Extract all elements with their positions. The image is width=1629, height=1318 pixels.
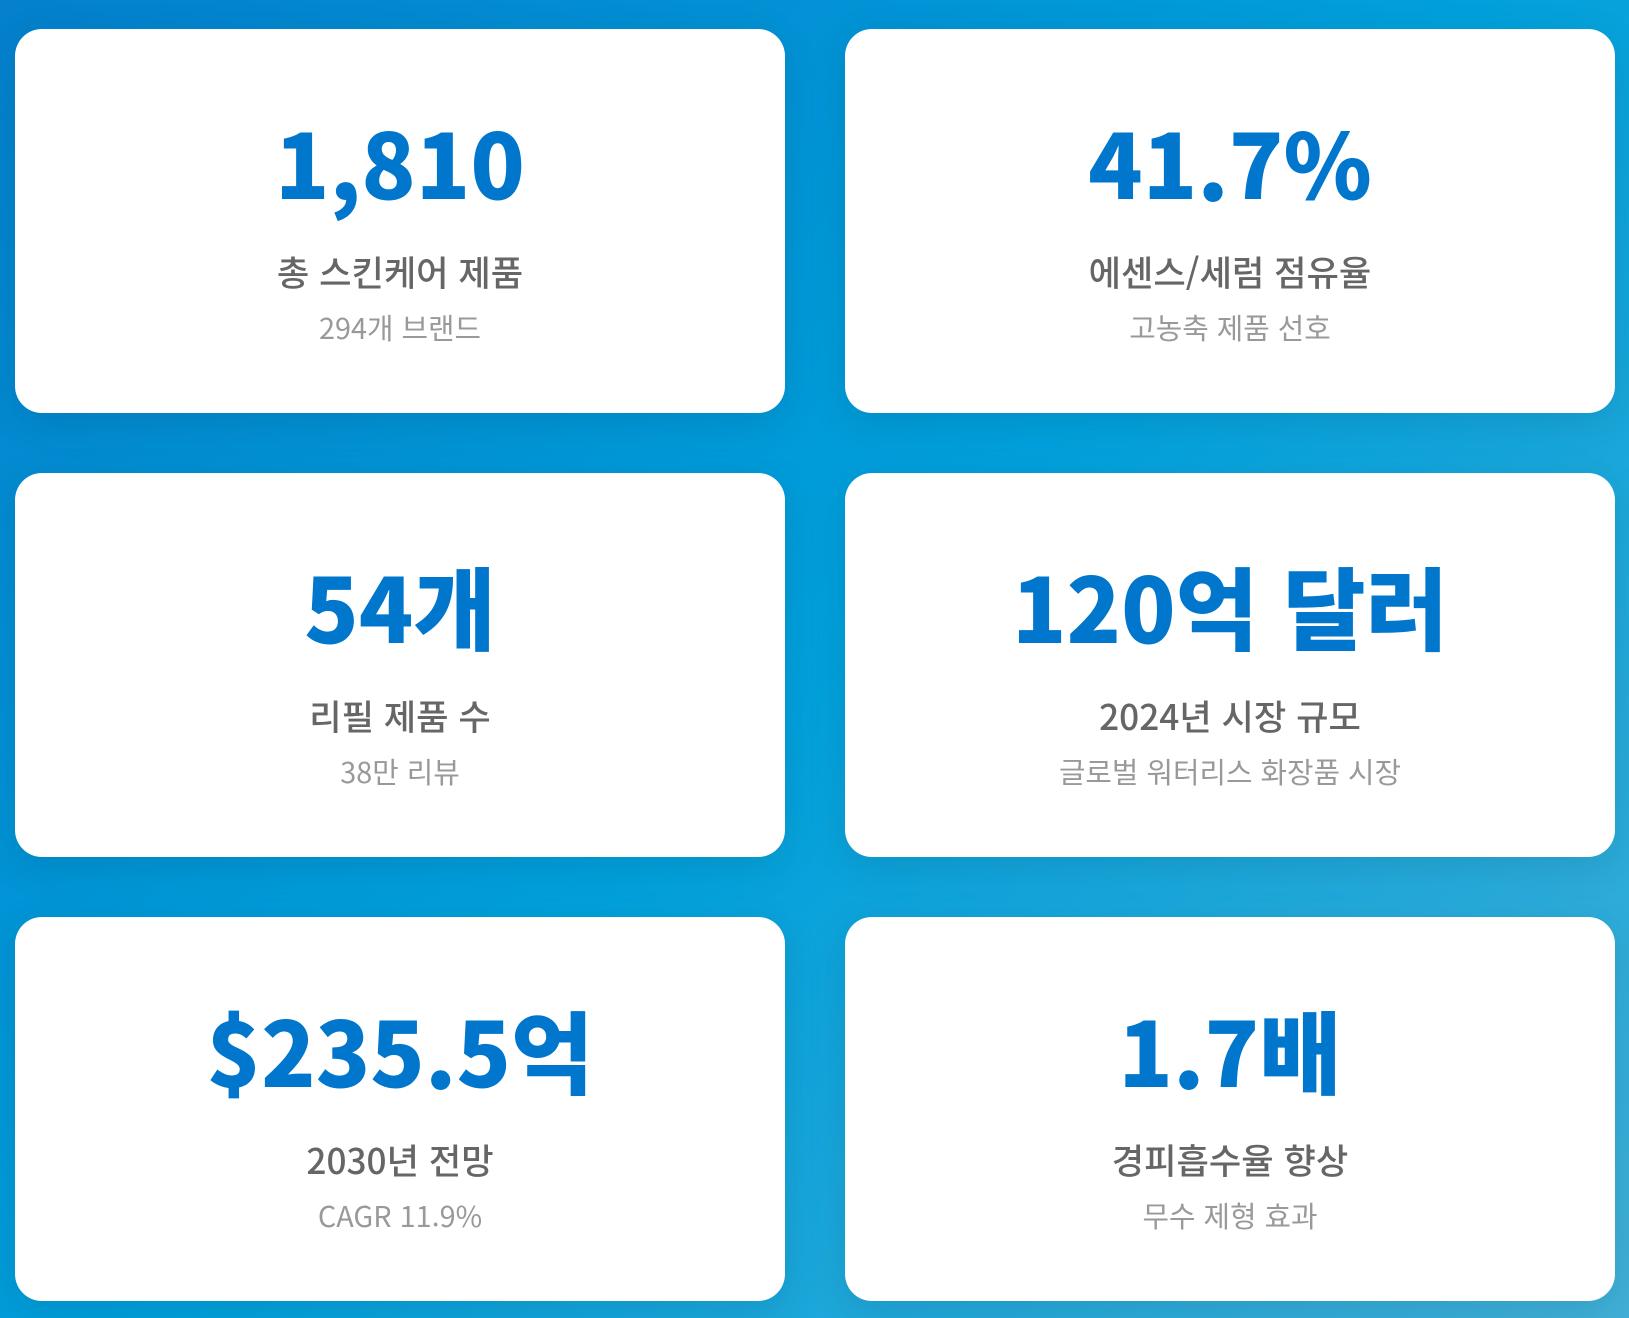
sub label: 380k reviews: 38만 리뷰 — [340, 751, 460, 792]
number: 54: 54개 — [304, 539, 496, 669]
stat card: total skincare products — [15, 29, 785, 413]
sub label: concentrated preference: 고농축 제품 선호 — [1129, 307, 1331, 348]
stat card: 2030 forecast — [15, 917, 785, 1301]
number: 1.7 times: 1.7배 — [1118, 983, 1342, 1113]
label: refill product count: 리필 제품 수 — [309, 690, 491, 741]
number: 41.7%: 41.7% — [1088, 95, 1372, 225]
label: 2024 market size: 2024년 시장 규모 — [1099, 690, 1361, 741]
label: essence/serum share: 에센스/세럼 점유율 — [1089, 246, 1371, 297]
stat card: 2024 market size — [845, 473, 1615, 857]
sub label: anhydrous formulation effect: 무수 제형 효과 — [1142, 1195, 1318, 1236]
label: skin absorption improvement: 경피흡수율 향상 — [1112, 1134, 1348, 1185]
label: total skincare products: 총 스킨케어 제품 — [277, 246, 523, 297]
sub label: 294 brands: 294개 브랜드 — [319, 307, 481, 348]
sub label: CAGR: CAGR 11.9% — [318, 1195, 482, 1236]
label: 2030 forecast: 2030년 전망 — [306, 1134, 494, 1185]
stat card: refill products — [15, 473, 785, 857]
stat card: absorption improvement — [845, 917, 1615, 1301]
number: $23.55 billion: $235.5억 — [207, 983, 593, 1113]
sub label: global waterless cosmetics market: 글로벌 워터리스 화장품 시장 — [1059, 751, 1401, 792]
stat card: essence/serum share — [845, 29, 1615, 413]
number: 12 billion dollars: 120억 달러 — [1012, 539, 1448, 669]
number: 1,810: 1,810 — [275, 95, 525, 225]
